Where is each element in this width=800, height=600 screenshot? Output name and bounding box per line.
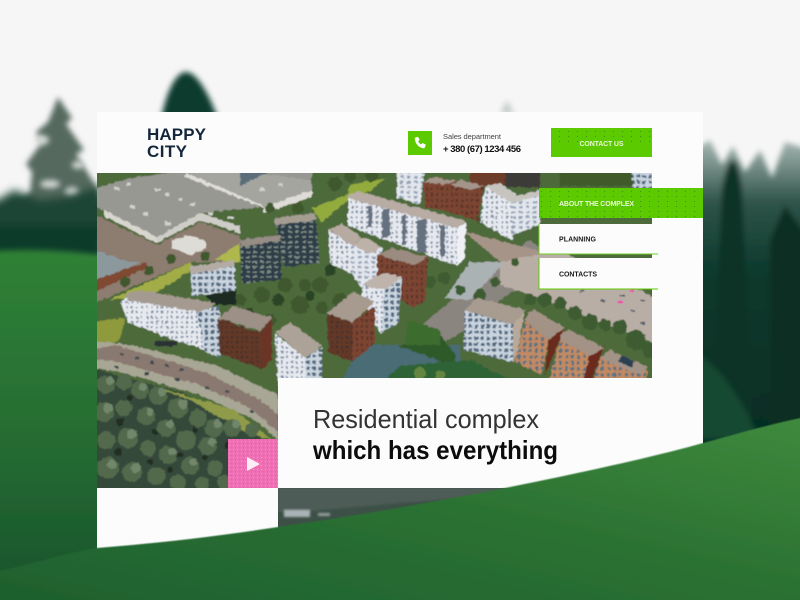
button: contact us: CONTACT US bbox=[580, 141, 624, 148]
roads and plazas bbox=[340, 232, 660, 385]
trees bbox=[120, 170, 378, 326]
headline: Residential complex bbox=[313, 404, 539, 434]
top buildings bbox=[397, 168, 658, 241]
sales department contact text bbox=[443, 132, 521, 155]
right forest bbox=[695, 140, 800, 450]
strip of blurred aerial under the card bbox=[270, 486, 532, 536]
trees by the right parking bbox=[424, 216, 658, 358]
parking cars bbox=[579, 290, 646, 326]
icon: phone bbox=[408, 131, 432, 155]
logo: HAPPY bbox=[147, 125, 207, 144]
menu item: contacts bbox=[539, 258, 658, 289]
headline: which has everything bbox=[312, 435, 558, 465]
lawns bbox=[90, 178, 385, 350]
car park strip and road, lower left bbox=[90, 340, 278, 440]
central cluster bbox=[329, 223, 428, 333]
foreground grassy hill bbox=[0, 417, 800, 600]
white page card bbox=[97, 112, 703, 572]
white block, bottom centre bbox=[275, 322, 322, 385]
ground: paved area near the mall bbox=[90, 212, 240, 305]
button: contact us bbox=[551, 128, 652, 157]
menu item: about the complex bbox=[539, 188, 703, 218]
brown block bbox=[218, 306, 272, 369]
menu item: planning bbox=[539, 224, 658, 254]
brown tower bbox=[327, 292, 375, 362]
logo bbox=[147, 125, 207, 161]
logo: CITY bbox=[147, 142, 188, 161]
orange blocks bbox=[515, 310, 648, 385]
aerial photograph of the residential complex bbox=[90, 165, 660, 495]
long curved white building on the left bbox=[120, 290, 220, 358]
low building near mall bbox=[172, 235, 206, 255]
left parking and wall bbox=[97, 250, 140, 280]
mid-left towers bbox=[190, 213, 320, 305]
sales department contact text: Sales department bbox=[443, 132, 502, 141]
sales department contact text: + 380 (67) 1234 456 bbox=[443, 144, 521, 155]
menu item: about the complex: ABOUT THE COMPLEX bbox=[559, 201, 634, 208]
headline bbox=[312, 404, 558, 465]
forest in the foreground bbox=[97, 369, 272, 488]
menu item: planning: PLANNING bbox=[559, 236, 597, 244]
navigation menu bbox=[539, 188, 703, 289]
mall roof bbox=[90, 170, 312, 243]
play button bbox=[228, 439, 278, 488]
menu item: contacts: CONTACTS bbox=[559, 272, 597, 278]
long white residential block bbox=[348, 191, 466, 266]
white block, bottom right bbox=[463, 298, 525, 362]
